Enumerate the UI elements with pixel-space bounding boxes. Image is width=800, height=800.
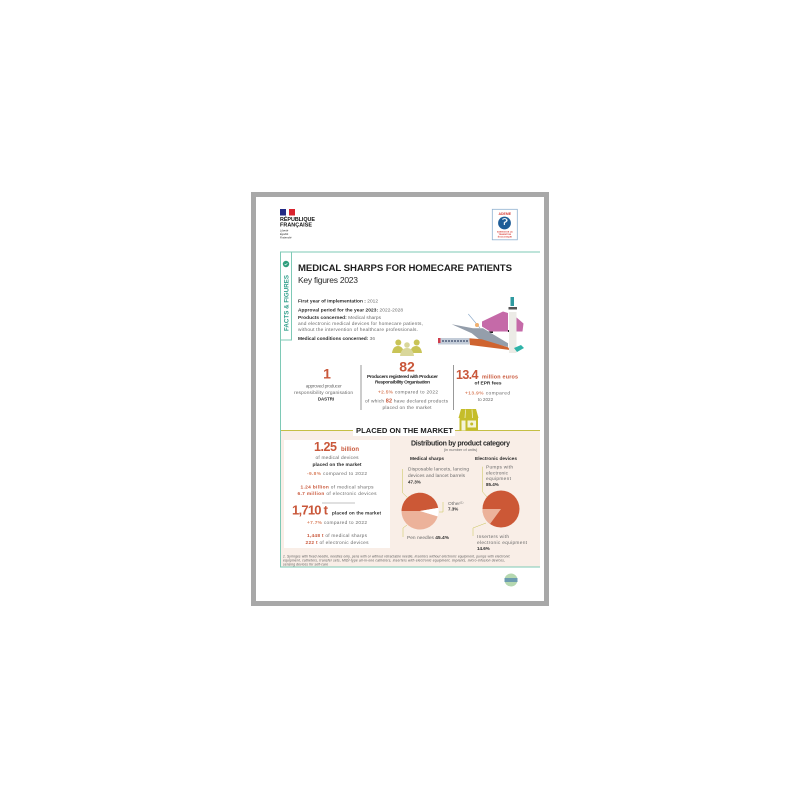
stat: approved PRO: 1 xyxy=(323,366,331,382)
heading: distribution: (in number of units) xyxy=(444,447,478,452)
chart: electronic devices pie: 85.4% xyxy=(486,482,499,487)
stat: EPR fees: million euros xyxy=(482,374,518,380)
stat: units: 1.25 xyxy=(314,440,337,454)
chart: electronic devices pie: Electronic devices xyxy=(475,456,517,462)
footnote xyxy=(283,554,510,566)
footnote: equipment, catheters, transfer sets, MIDI-type all-in-one catheters, inserters with electronic equipment, implants, micro-infusion devices, xyxy=(283,558,505,562)
logo: ADEME: ÉCOLOGIQUE xyxy=(498,236,512,238)
stat: registered producers: Responsibility Organisation xyxy=(375,380,430,386)
text block: scheme facts: without the intervention of healthcare professionals. xyxy=(298,327,418,333)
text block: scheme facts: Medical conditions concerned: 36 xyxy=(298,336,375,342)
chart: medical sharps pie: 7.3% xyxy=(448,506,458,512)
footnote: sensing devices for self-care xyxy=(283,562,328,566)
panel: peach market background xyxy=(281,430,540,567)
subtitle: Key figures 2023 xyxy=(298,275,358,285)
stat: approved PRO: approved producer xyxy=(306,384,342,390)
section heading: placed on the market xyxy=(281,425,540,436)
logo: République Française: FRANÇAISE xyxy=(280,223,312,229)
section heading: placed on the market: PLACED ON THE MARKET xyxy=(356,426,453,435)
panel frame: teal borders xyxy=(280,252,540,567)
chart: medical sharps pie: (1) xyxy=(460,501,463,505)
logo: République Française: Égalité xyxy=(280,231,289,236)
page sheet with grey frame xyxy=(254,194,546,604)
chart: electronic devices pie: electronic equipment xyxy=(477,540,528,546)
text block: scheme facts: Products concerned: Medical sharps xyxy=(298,315,382,321)
stat: units: 6.7 million of electronic devices xyxy=(298,491,377,497)
text block: scheme facts: and electronic medical devices for homecare patients, xyxy=(298,321,423,327)
logo: bottom right seal xyxy=(504,574,518,586)
chart: medical sharps pie: Other xyxy=(448,502,460,507)
stat: EPR fees: to 2022 xyxy=(478,397,494,402)
stat: approved PRO: responsibility organisation xyxy=(294,390,353,396)
stat: units: 1.24 billion of medical sharps xyxy=(300,484,374,490)
illustration: syringes, pen and pump xyxy=(438,297,524,353)
logo: ADEME: TRANSITION xyxy=(498,233,512,236)
stat: units: billion xyxy=(341,447,359,453)
icon: shop xyxy=(458,409,478,430)
stat: registered producers: +2.5% compared to 2022 xyxy=(378,389,438,395)
chart: electronic devices pie: equipment xyxy=(486,476,512,482)
divider xyxy=(360,365,362,410)
stat: EPR fees: of EPR fees xyxy=(474,381,502,387)
text block: scheme facts xyxy=(298,298,423,342)
stat: tonnage: 1,448 t of medical sharps xyxy=(307,533,368,539)
logo: ADEME: AGENCE DE LA xyxy=(497,230,513,234)
stat: units: placed on the market xyxy=(312,462,362,468)
stat: EPR fees: 13.4 xyxy=(456,368,479,382)
panel: market totals card xyxy=(284,440,390,548)
stat: units: -9.8% compared to 2022 xyxy=(307,471,367,477)
logo: République Française: Fraternité xyxy=(280,236,292,240)
chart: medical sharps pie: Disposable lancets, lancing xyxy=(408,466,469,472)
logo: République Française: Liberté xyxy=(280,228,289,232)
chart: electronic devices pie xyxy=(473,456,528,551)
logo: ADEME: ADEME xyxy=(498,212,512,216)
stat: approved PRO xyxy=(294,366,353,401)
chart: electronic devices pie: Inserters with xyxy=(477,534,509,540)
icon: group of people xyxy=(392,340,422,356)
badge: facts and figures: FACTS & FIGURES xyxy=(283,275,290,331)
logo: République Française xyxy=(280,209,315,240)
stat: registered producers: of which 82 have declared products xyxy=(365,399,449,405)
divider xyxy=(452,365,455,410)
stat: tonnage: placed on the market xyxy=(332,510,381,516)
stat: tonnage: +7.7% compared to 2022 xyxy=(307,520,367,526)
stat: EPR fees xyxy=(456,368,518,402)
chart: medical sharps pie: Medical sharps xyxy=(410,456,444,462)
text block: scheme facts: Approval period for the year 2023: 2022-2028 xyxy=(298,308,403,314)
heading: distribution: Distribution by product category xyxy=(411,440,510,448)
chart: medical sharps pie: 47.3% xyxy=(408,479,421,484)
chart: electronic devices pie: 14.6% xyxy=(477,546,490,551)
stat: tonnage: 1,710 t xyxy=(292,502,329,518)
stat: tonnage xyxy=(292,502,381,546)
chart: medical sharps pie: Pen needles 45.4% xyxy=(407,535,450,541)
title: MEDICAL SHARPS FOR HOMECARE PATIENTS xyxy=(298,263,513,274)
text block: scheme facts: First year of implementation : 2012 xyxy=(298,298,378,304)
heading: distribution xyxy=(411,440,510,452)
logo: République Française: RÉPUBLIQUE xyxy=(280,215,315,223)
stat: approved PRO: DASTRI xyxy=(318,396,334,401)
stat: units xyxy=(298,440,377,497)
chart: medical sharps pie: devices and lancet barrels xyxy=(408,473,466,479)
chart: medical sharps pie xyxy=(402,456,469,541)
chart: electronic devices pie: electronic xyxy=(486,470,509,476)
stat: registered producers: 82 xyxy=(399,358,415,374)
stat: registered producers: placed on the market xyxy=(382,405,432,411)
stat: tonnage: 222 t of electronic devices xyxy=(306,540,369,546)
footnote: 1. Syringes with fixed needle, needles only, pens with or without retractable needle, inserters without electronic equipment, pumps with electronic xyxy=(283,554,510,558)
stat: EPR fees: +13.9% compared xyxy=(465,390,510,396)
stat: registered producers xyxy=(365,358,449,411)
chart: electronic devices pie: Pumps with xyxy=(486,464,513,470)
logo: ADEME xyxy=(492,209,517,240)
stat: units: of medical devices xyxy=(316,455,359,461)
stat: registered producers: Producers registered with Producer xyxy=(367,374,438,380)
